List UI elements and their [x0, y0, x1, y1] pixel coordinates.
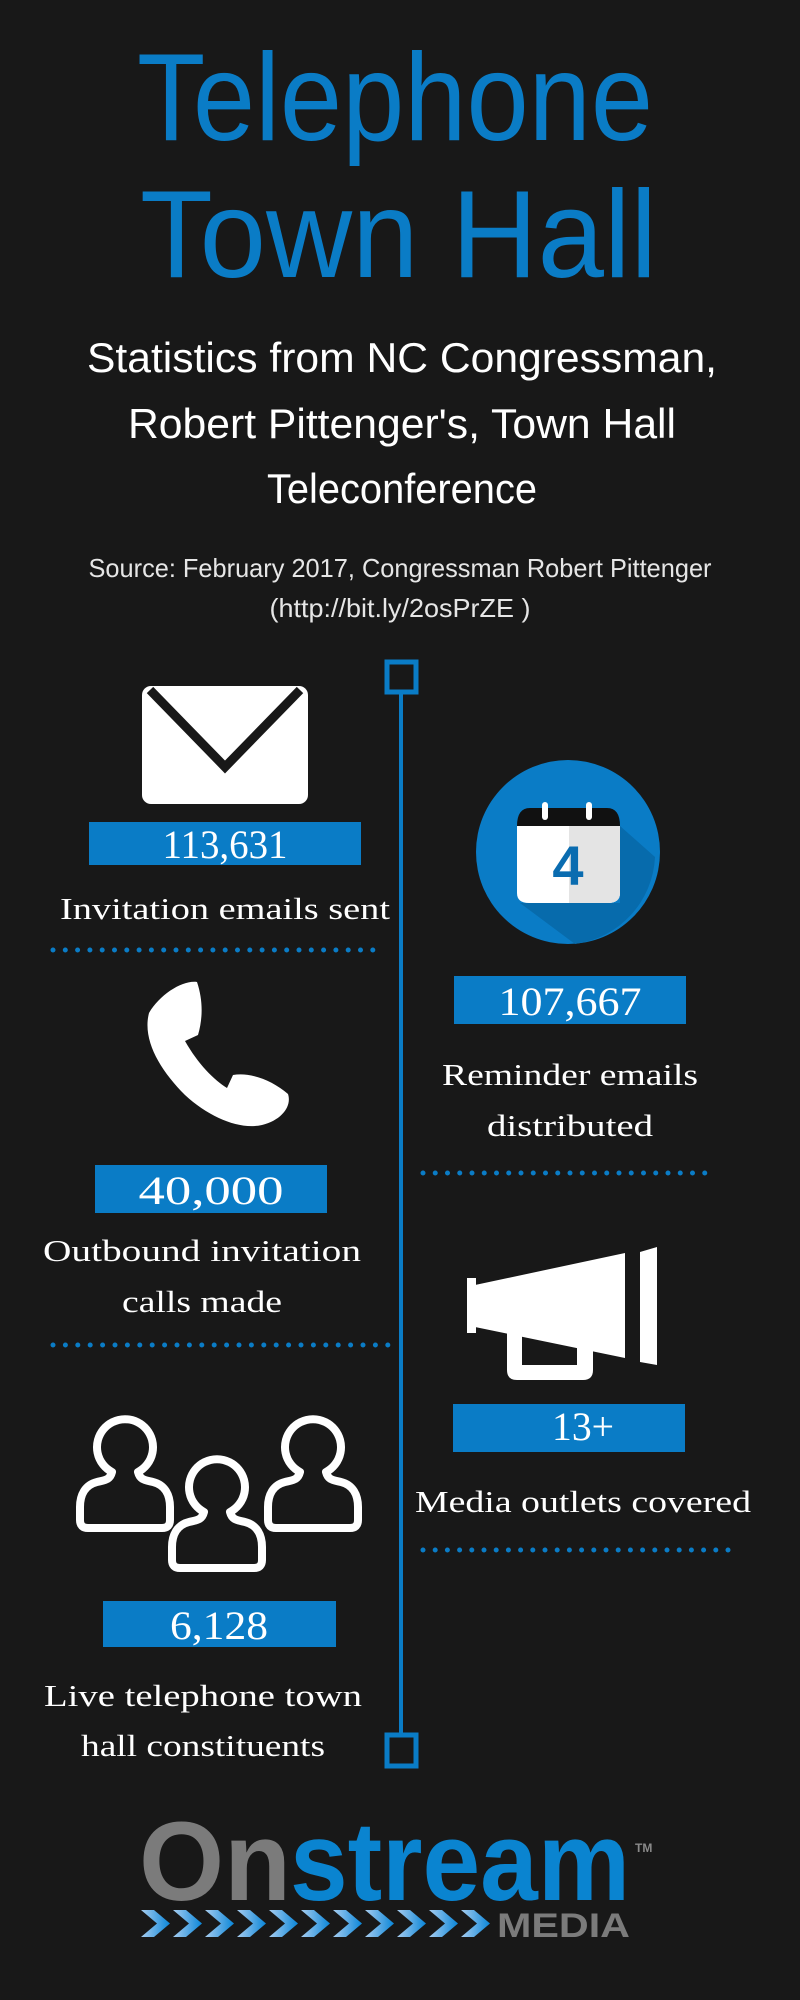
icon: phone	[147, 982, 289, 1126]
subtitle: Robert Pittenger's, Town Hall	[128, 400, 676, 447]
logo: Onstream Media: MEDIA	[497, 1907, 630, 1945]
source	[88, 553, 712, 623]
bar: 40,000	[95, 1165, 327, 1213]
label: outbound calls	[43, 1233, 362, 1319]
label: reminder emails: distributed	[487, 1108, 654, 1143]
icon: calendar	[476, 760, 660, 944]
bar: 40,000: 40,000	[138, 1168, 284, 1213]
source: (http://bit.ly/2osPrZE )	[270, 593, 530, 623]
icon: people	[80, 1419, 358, 1568]
icon: megaphone	[467, 1247, 657, 1380]
bar: 6,128	[103, 1601, 336, 1648]
dotted divider 4	[423, 1548, 740, 1552]
icon: calendar: 4	[552, 834, 584, 897]
bar: 107,667: 107,667	[498, 979, 642, 1024]
label: reminder emails: Reminder emails	[442, 1057, 698, 1092]
subtitle: Statistics from NC Congressman,	[87, 334, 717, 381]
bar: 13+: 13+	[552, 1404, 614, 1449]
bar: 6,128: 6,128	[170, 1603, 268, 1648]
logo: Onstream Media: stream	[290, 1799, 630, 1924]
dotted divider 3	[423, 1170, 717, 1176]
label: constituents: hall constituents	[81, 1728, 325, 1763]
bar: 107,667	[454, 976, 686, 1024]
title	[137, 29, 657, 304]
label: invitation emails: Invitation emails sent	[60, 891, 390, 926]
bar: 113,631	[89, 822, 361, 867]
bar: 13+	[453, 1404, 685, 1452]
subtitle: Teleconference	[267, 465, 537, 512]
label: constituents: Live telephone town	[44, 1678, 363, 1713]
bar: 113,631: 113,631	[162, 822, 288, 867]
label: outbound calls: Outbound invitation	[43, 1233, 362, 1268]
logo: Onstream Media	[139, 1799, 652, 1945]
label: constituents	[44, 1678, 363, 1763]
title: Telephone	[137, 29, 653, 167]
logo: Onstream Media: On	[139, 1799, 291, 1924]
icon: envelope	[142, 686, 308, 804]
label: outbound calls: calls made	[122, 1284, 282, 1319]
label: media outlets: Media outlets covered	[415, 1484, 752, 1519]
timeline	[387, 662, 416, 1766]
dotted divider 2	[53, 1342, 388, 1348]
logo: Onstream Media: TM	[635, 1841, 652, 1855]
title: Town Hall	[140, 166, 657, 304]
subtitle	[87, 334, 717, 512]
label: reminder emails	[442, 1057, 698, 1143]
dotted divider 1	[53, 948, 385, 952]
source: Source: February 2017, Congressman Robert Pittenger	[88, 553, 712, 583]
